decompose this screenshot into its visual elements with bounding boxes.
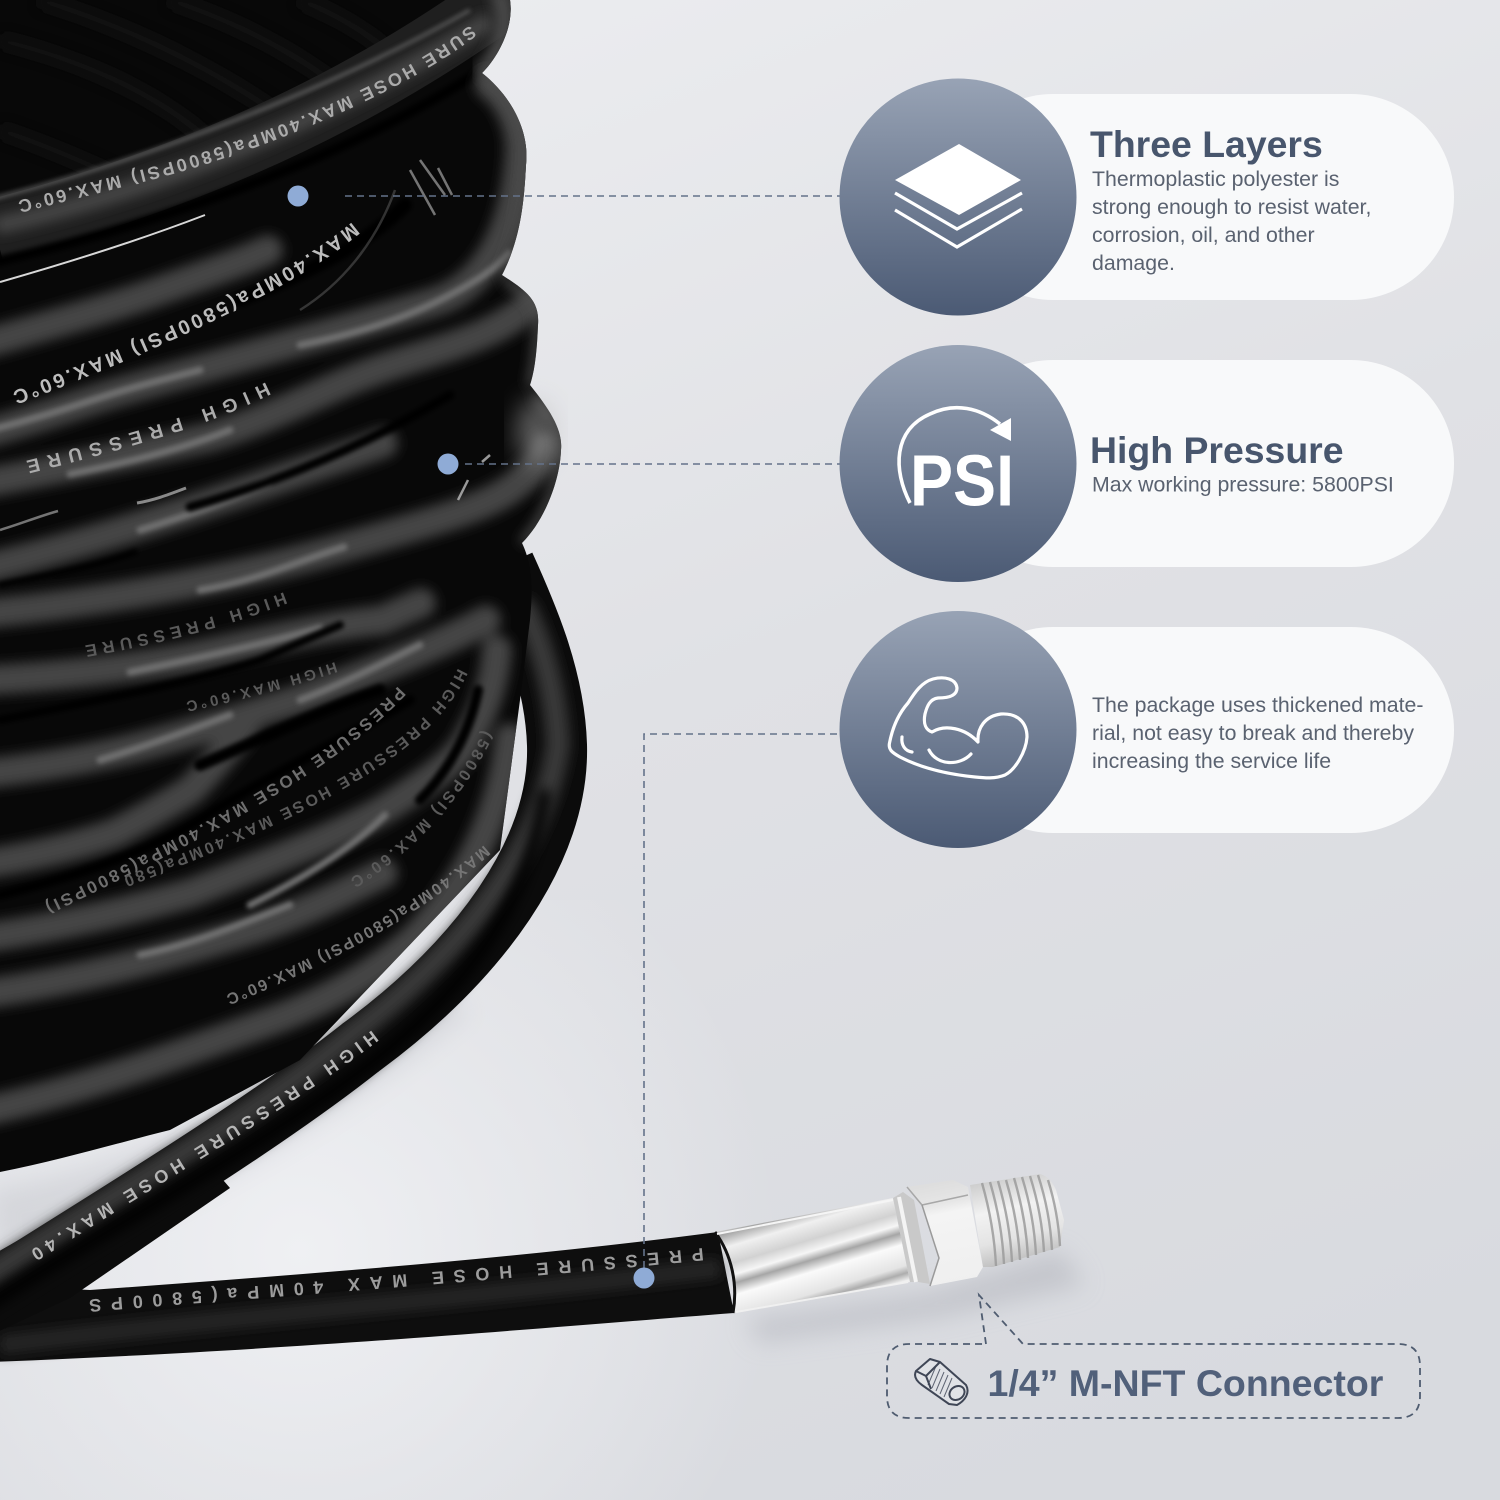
printed hose markings: HIGH PRESSURE HOSE MAX.40 bbox=[32, 1030, 378, 1260]
hose coil photo bbox=[0, 0, 734, 1363]
icon: flexed arm bbox=[889, 678, 1027, 778]
icon: layers bbox=[895, 144, 1022, 247]
body text: rial, not easy to break and thereby bbox=[1092, 721, 1414, 745]
inner coil arcs bbox=[8, 2, 380, 167]
panel: high pressure bbox=[840, 345, 1454, 582]
printed hose markings: PRESSURE HOSE MAX 40MPa(5800PS bbox=[90, 1248, 703, 1312]
dot 1 bbox=[288, 186, 308, 206]
icon: PSI gauge bbox=[899, 408, 1014, 522]
disc bbox=[840, 78, 1076, 316]
body text: increasing the service life bbox=[1092, 749, 1331, 773]
heading: High Pressure bbox=[1090, 429, 1344, 471]
printed hose markings: HIGH PRESSURE bbox=[26, 382, 270, 474]
dot 3 bbox=[634, 1268, 654, 1288]
printed hose markings: HIGH PRESSURE bbox=[85, 592, 287, 657]
dashed speech bubble bbox=[887, 1295, 1420, 1418]
heading: Three Layers bbox=[1090, 123, 1323, 165]
threaded end bbox=[970, 1174, 1064, 1267]
narrow specular highlights bbox=[0, 253, 509, 955]
leader: thickened bbox=[644, 734, 840, 1268]
panel: three layers bbox=[840, 78, 1454, 316]
printed hose markings: PRESSURE HOSE MAX.40MPa(5800PSI) bbox=[46, 687, 406, 914]
callout lines and dots bbox=[288, 186, 840, 1288]
collar bbox=[893, 1192, 930, 1284]
dot 2 bbox=[438, 454, 458, 474]
panel: thickened material bbox=[840, 611, 1454, 848]
icon: connector fitting bbox=[915, 1359, 968, 1405]
soft floor shadow bbox=[0, 990, 470, 1290]
connector shadow bbox=[745, 1250, 1085, 1342]
body text: The package uses thickened mate- bbox=[1092, 693, 1423, 717]
printed hose markings bbox=[14, 26, 703, 1312]
top ring tube bbox=[0, 0, 520, 262]
glints in gaps bbox=[0, 160, 490, 530]
pill bbox=[950, 627, 1454, 833]
disc bbox=[840, 345, 1076, 582]
callout: connector label bbox=[887, 1295, 1420, 1418]
body text: corrosion, oil, and other bbox=[1092, 223, 1315, 247]
printed hose markings: (5800PSI) MAX.60°C bbox=[352, 731, 493, 886]
body text bbox=[1092, 693, 1423, 773]
pill bbox=[950, 360, 1454, 567]
pill bbox=[950, 94, 1454, 300]
printed hose markings: HIGH PRESSURE HOSE MAX.40MPa(5800PSI) bbox=[125, 669, 468, 886]
coil silhouette bbox=[0, 0, 561, 1172]
hex nut bbox=[907, 1180, 983, 1286]
black gaps between tubes bbox=[0, 422, 486, 875]
body text: strong enough to resist water, bbox=[1092, 195, 1371, 219]
label: 1/4” M-NFT Connector bbox=[988, 1362, 1384, 1404]
printed hose markings: MAX.40MPa(5800PSI) MAX.60°C bbox=[14, 222, 360, 403]
body text bbox=[1092, 167, 1371, 275]
crimp ferrule bbox=[715, 1198, 910, 1313]
leader: high pressure bbox=[465, 463, 840, 465]
straight hose end bbox=[0, 1232, 734, 1362]
body text: Thermoplastic polyester is bbox=[1092, 167, 1339, 191]
blurry light patch on coil edge bbox=[516, 398, 556, 466]
icon: PSI gauge: PSI bbox=[910, 442, 1014, 522]
disc bbox=[840, 611, 1076, 848]
broad tube bands bbox=[0, 85, 547, 1110]
leader: three layers bbox=[345, 195, 840, 197]
printed hose markings: MAX.40MPa(5800PSI) MAX.60°C bbox=[227, 846, 490, 1004]
outer hose loop bbox=[0, 565, 558, 1340]
printed hose markings: SURE HOSE MAX.40MPa(5800PSI) MAX.60°C bbox=[18, 26, 476, 212]
body text: Max working pressure: 5800PSI bbox=[1092, 472, 1394, 496]
printed hose markings: HIGH MAX.60°C bbox=[186, 662, 338, 711]
stacked coil tubes bbox=[0, 0, 561, 1110]
metal connector bbox=[715, 1174, 1085, 1342]
edge light on right of coil bbox=[498, 88, 562, 548]
body text: damage. bbox=[1092, 251, 1175, 275]
